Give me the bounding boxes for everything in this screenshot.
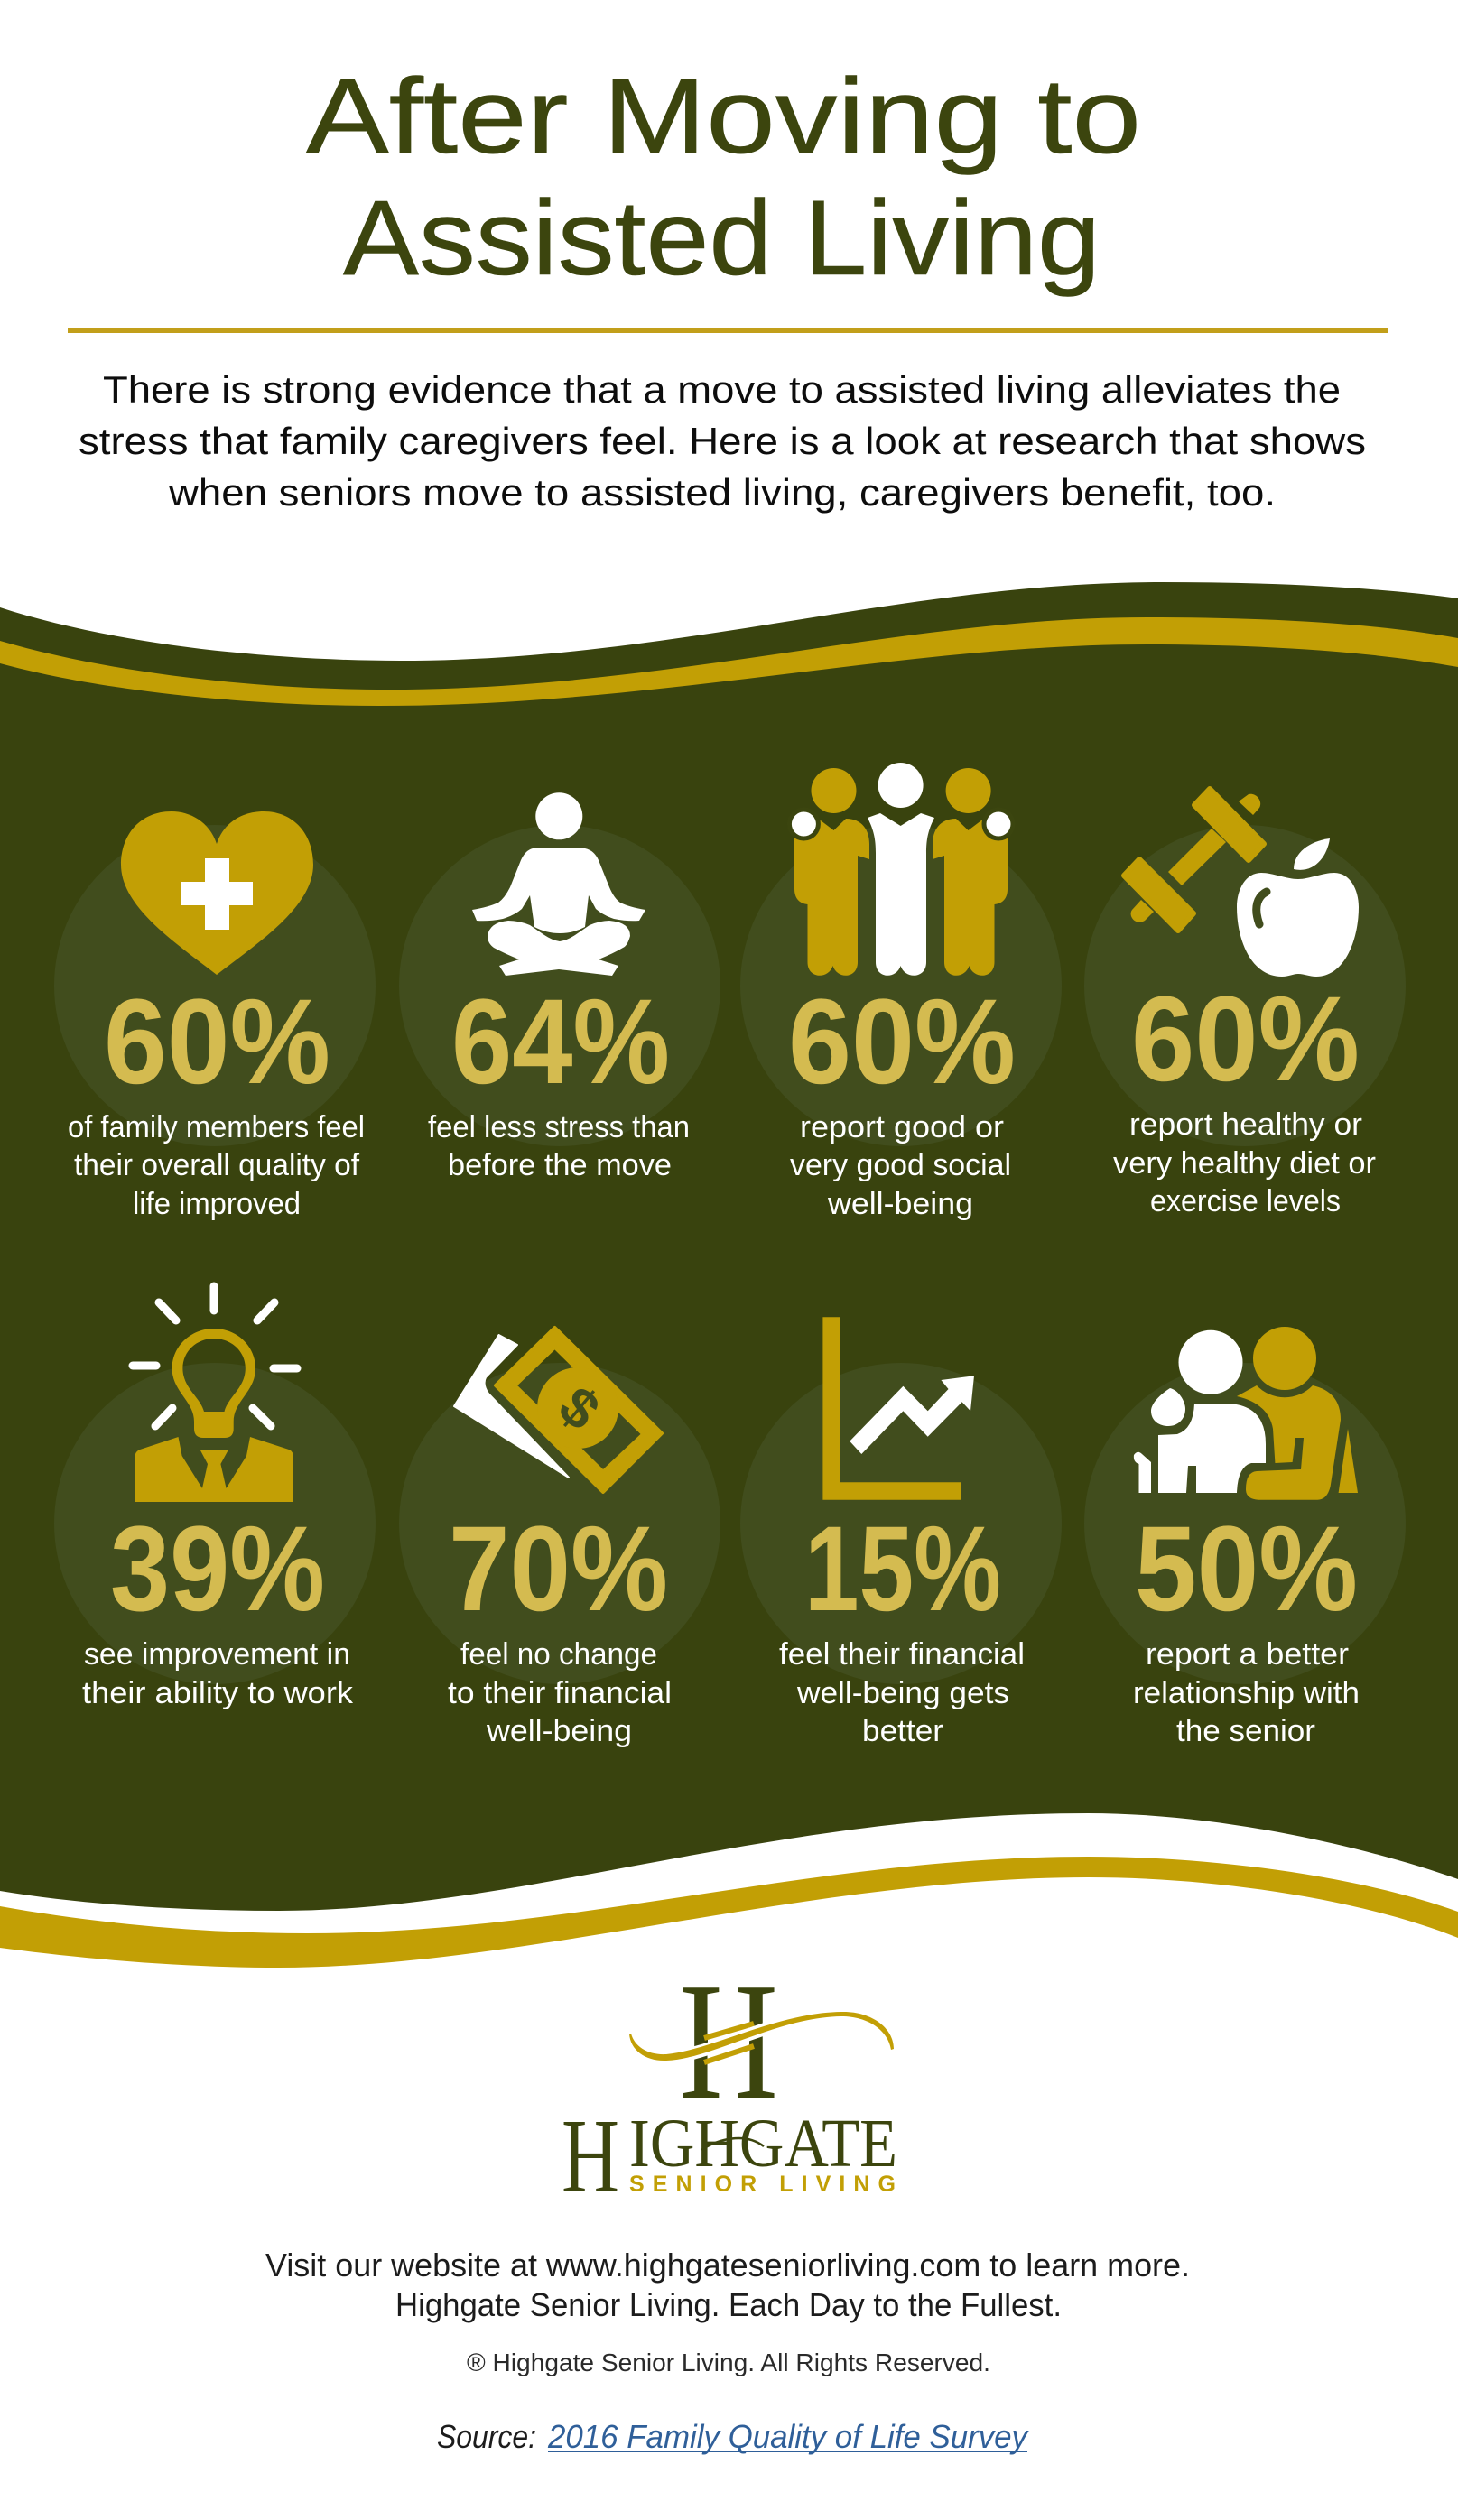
label: life improved [133, 1187, 301, 1221]
stat: 60% social well-being [788, 763, 1016, 1221]
tagline: SENIOR LIVING [629, 2172, 896, 2197]
label: report a better [1146, 1637, 1349, 1672]
logo mark H with swoosh [629, 1949, 894, 2135]
label: before the move [448, 1148, 672, 1182]
number: 70% [449, 1502, 668, 1636]
icon: dollar bill [454, 1328, 662, 1492]
number: 39% [110, 1502, 325, 1636]
label [1133, 1637, 1360, 1748]
wordmark [562, 2097, 897, 2215]
label: relationship with [1133, 1676, 1360, 1710]
logo: Highgate Senior Living [562, 1949, 897, 2215]
intro paragraph: stress that family caregivers feel. Here is a look at research that shows [79, 420, 1366, 462]
wordmark: H [562, 2097, 619, 2215]
label: well-being [486, 1714, 632, 1748]
label [82, 1637, 354, 1710]
icon: heart with cross [121, 811, 313, 975]
label: to their financial [448, 1676, 672, 1710]
icon: three people [792, 763, 1011, 976]
label: better [862, 1714, 943, 1748]
footer text [265, 2247, 1190, 2323]
copyright: ® Highgate Senior Living. All Rights Reserved. [467, 2349, 990, 2376]
label: very healthy diet or [1113, 1146, 1376, 1181]
label: see improvement in [84, 1637, 350, 1672]
label: feel no change [460, 1637, 657, 1672]
stat: 60% quality of life [68, 811, 365, 1221]
number: 15% [804, 1502, 1001, 1636]
label [68, 1110, 365, 1221]
source citation: 2016 Family Quality of Life Survey [547, 2418, 1029, 2455]
label: report good or [800, 1110, 1004, 1144]
label: well-being [827, 1187, 973, 1221]
stat circles [54, 825, 1406, 1684]
stat: 64% less stress [428, 792, 690, 1182]
title [306, 57, 1141, 298]
label [790, 1110, 1011, 1221]
icon: rising chart [822, 1317, 974, 1500]
label [779, 1637, 1025, 1748]
logo mark H with swoosh: H [679, 1949, 778, 2135]
number: 50% [1135, 1502, 1358, 1636]
title: After Moving to [306, 57, 1141, 176]
label [428, 1110, 690, 1182]
label: the senior [1176, 1714, 1315, 1748]
intro paragraph: There is strong evidence that a move to assisted living alleviates the [103, 368, 1341, 411]
panel: dark green wave background [0, 582, 1458, 1911]
icon: lightbulb head with suit [133, 1286, 297, 1502]
stat: 50% better relationship [1133, 1327, 1360, 1748]
icon: dollar bill: $ [547, 1375, 611, 1442]
icon: meditating person [472, 792, 645, 976]
label: feel less stress than [428, 1110, 690, 1144]
number: 60% [788, 975, 1016, 1109]
label: feel their financial [779, 1637, 1025, 1672]
label: report healthy or [1129, 1107, 1362, 1142]
stat: 39% ability to work [82, 1286, 354, 1710]
label [448, 1637, 672, 1748]
bottom gold wave band [0, 1857, 1458, 1968]
number: 60% [1131, 972, 1360, 1107]
label: of family members feel [68, 1110, 365, 1144]
icon: caregiver with senior [1134, 1327, 1358, 1500]
label: their overall quality of [74, 1148, 360, 1182]
label [1113, 1107, 1376, 1218]
stat: 70% no financial change [448, 1328, 672, 1748]
label: very good social [790, 1148, 1011, 1182]
intro paragraph [79, 368, 1366, 514]
footer text: Visit our website at www.highgateseniorliving.com to learn more. [265, 2247, 1190, 2284]
stat: 60% diet and exercise [1113, 789, 1376, 1218]
label: well-being gets [796, 1676, 1009, 1710]
source citation: Source: [437, 2418, 536, 2455]
wordmark: IGHGATE [629, 2106, 897, 2182]
icon: dumbbell and apple [1124, 789, 1359, 977]
title: Assisted Living [343, 179, 1100, 298]
intro paragraph: when seniors move to assisted living, caregivers benefit, too. [168, 471, 1276, 514]
label: their ability to work [82, 1676, 354, 1710]
label: exercise levels [1150, 1184, 1341, 1218]
number: 60% [104, 975, 330, 1109]
stat: 15% financial well-being better [779, 1317, 1025, 1748]
footer text: Highgate Senior Living. Each Day to the Fullest. [395, 2286, 1062, 2323]
top gold wave band [0, 617, 1458, 706]
number: 64% [451, 975, 670, 1109]
